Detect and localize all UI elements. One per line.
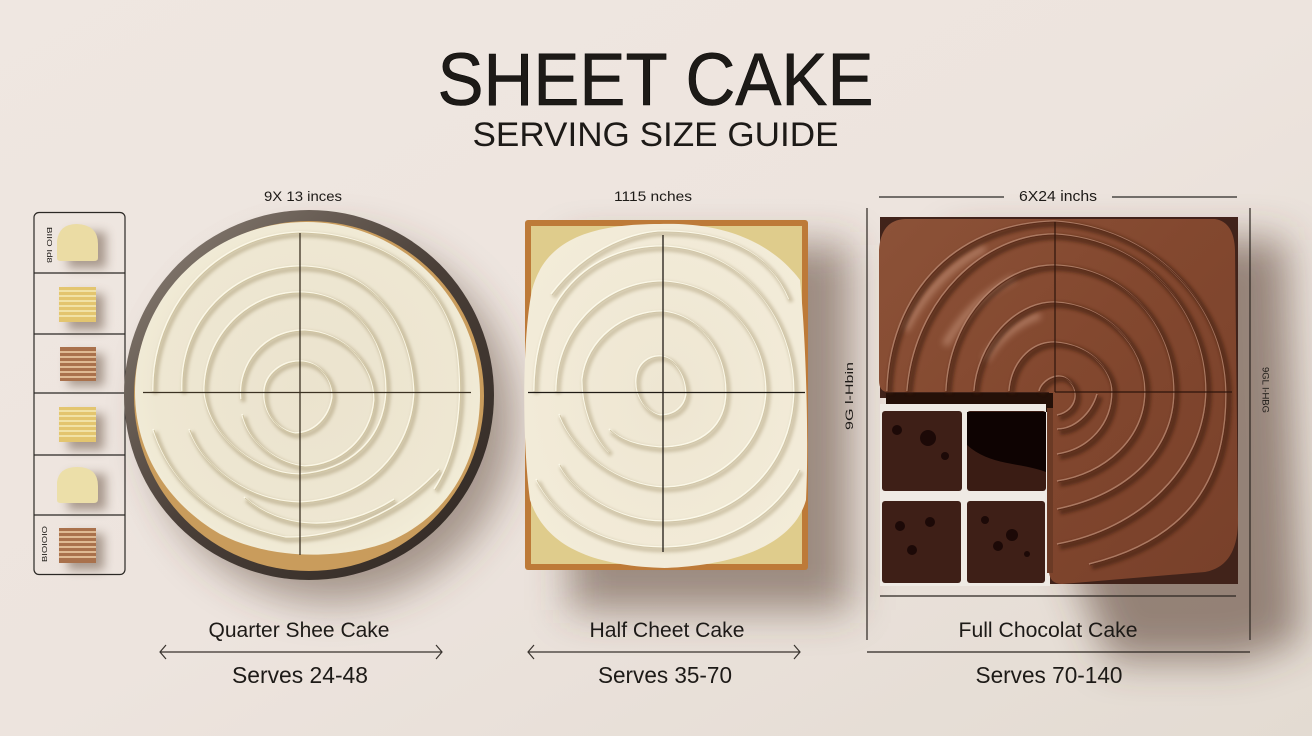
legend label top: BIIO Id8 (45, 227, 54, 263)
cut guide: horizontal (1055, 391, 1232, 393)
caption: half cake (528, 618, 800, 688)
frosting (524, 224, 807, 568)
slice: striped vanilla (59, 287, 96, 322)
plate (124, 210, 494, 580)
frosting swirl ridges (153, 232, 462, 540)
frosting swirl ridges (534, 231, 802, 550)
crumb (531, 226, 802, 564)
caption: half cake: Serves 35-70 (598, 662, 732, 688)
title: SHEET CAKE (438, 38, 874, 121)
legend label bottom: BIOIOIO (40, 526, 49, 562)
arrow: half cake width (528, 645, 800, 659)
dimension: half cake: 1115 nches (614, 188, 692, 204)
frosting (879, 219, 1238, 584)
subtitle: SERVING SIZE GUIDE (472, 116, 838, 154)
legend frame (34, 212, 125, 574)
caption: full cake: Full Chocolat Cake (958, 618, 1138, 642)
cake shadows (150, 238, 1300, 660)
dimension: quarter cake: 9X 13 inces (264, 188, 342, 204)
panel: half sheet cake (524, 220, 808, 570)
cutout (880, 404, 1050, 586)
dimension: full cake sides: 9GL l-HBG (1261, 367, 1271, 413)
cut face (886, 393, 1053, 412)
caption: full cake: Serves 70-140 (976, 662, 1122, 688)
cut guide: vertical (662, 235, 664, 552)
slice shadows (68, 232, 106, 570)
cake square 2 (967, 411, 1046, 491)
panel: slice legend (34, 212, 125, 574)
cut guide: vertical (1054, 222, 1056, 392)
frosting gloss (905, 248, 1040, 360)
cake square 1 (882, 411, 962, 491)
frosting (135, 222, 480, 555)
slice: striped caramel (59, 528, 96, 563)
arrow: quarter cake width (160, 645, 442, 659)
caption: full cake (958, 618, 1138, 688)
panel: quarter sheet round cake (124, 210, 494, 580)
slice: round vanilla (57, 224, 98, 261)
slice: striped vanilla (59, 407, 96, 442)
cake square 3 (882, 501, 961, 583)
caption: quarter cake (160, 618, 442, 688)
dimension: full cake sides: 9G l-Hbin (844, 362, 856, 430)
cake square 4 (967, 501, 1045, 583)
slice: striped caramel (60, 347, 96, 381)
panel: full chocolate cake (879, 217, 1238, 586)
slice: round vanilla (57, 467, 98, 503)
cake base (880, 217, 1238, 584)
dimension: full cake sides (844, 208, 1271, 652)
caption: half cake: Half Cheet Cake (590, 618, 744, 642)
cut guide: horizontal (528, 392, 805, 394)
cut guide: horizontal (143, 392, 471, 394)
frosting swirl ridges (887, 221, 1229, 567)
caption: quarter cake: Quarter Shee Cake (208, 618, 390, 642)
cake base (525, 220, 808, 570)
dimension: full cake width: 6X24 inchs (1019, 189, 1097, 205)
caption: quarter cake: Serves 24-48 (232, 662, 368, 688)
cut guide: vertical (299, 233, 301, 555)
cake base (134, 221, 484, 571)
